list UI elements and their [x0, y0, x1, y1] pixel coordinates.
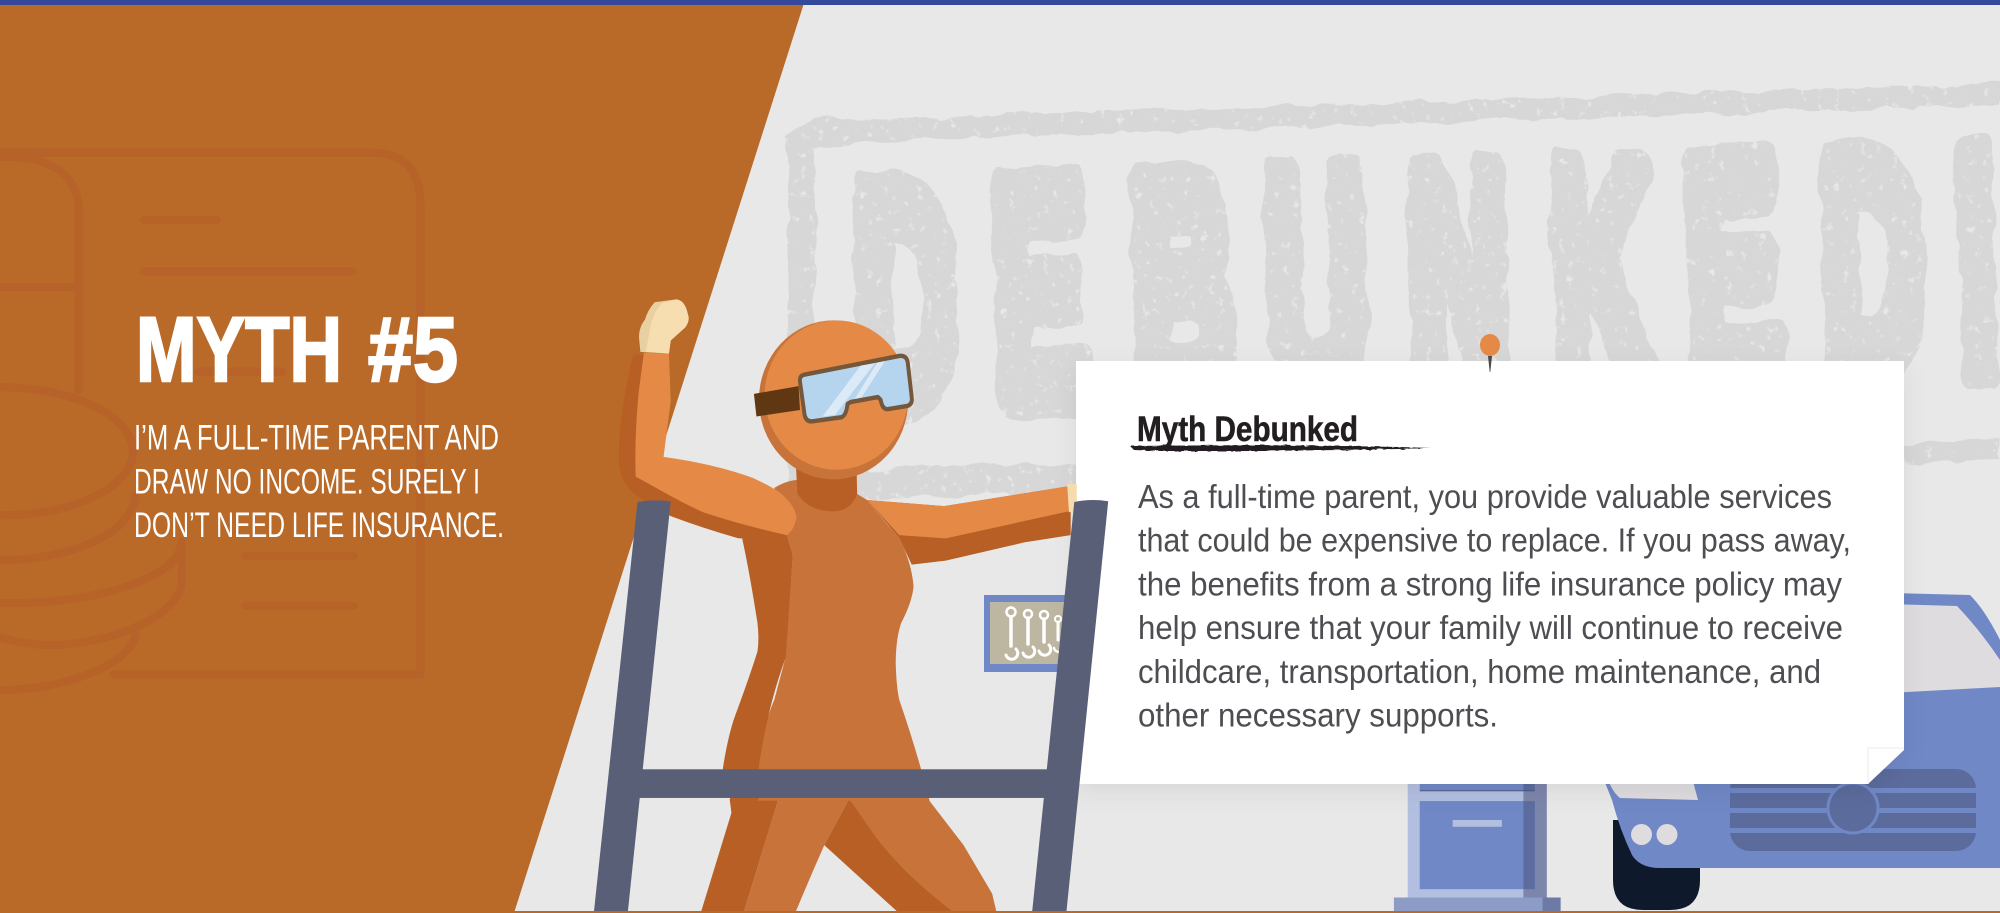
heading: Myth Debunked [1137, 410, 1358, 449]
top bar [0, 0, 2000, 5]
file cabinet [1394, 774, 1561, 912]
raised fist [639, 299, 689, 353]
torso [746, 480, 930, 801]
body text: that could be expensive to replace. If you pass away, [1138, 522, 1851, 559]
orange myth panel [0, 0, 805, 913]
body text: help ensure that your family will continue to receive [1138, 609, 1843, 646]
body text: other necessary supports. [1138, 696, 1498, 734]
left arm shadow [619, 355, 789, 538]
icon: pushpin [1480, 334, 1500, 372]
hand [1067, 484, 1077, 512]
myth statement: I’M A FULL-TIME PARENT AND [134, 418, 499, 458]
title: MYTH [136, 299, 342, 401]
brush underline [1130, 445, 1432, 451]
stamp border [788, 84, 2000, 500]
car lights [1631, 824, 1652, 845]
body text: the benefits from a strong life insurance policy may [1138, 565, 1842, 602]
myth statement: DRAW NO INCOME. SURELY I [134, 462, 480, 502]
myth statement: DON’T NEED LIFE INSURANCE. [134, 506, 504, 545]
neck [796, 462, 857, 511]
car [1600, 593, 2000, 910]
icon: wrenches [1006, 608, 1064, 659]
goggles [754, 356, 912, 421]
ghost icon: document and coins [0, 153, 420, 690]
card fold [1868, 748, 1904, 784]
debunked stamp [788, 84, 2000, 500]
car windshield [1890, 604, 2000, 693]
ladder [594, 500, 1108, 912]
figure with goggles [594, 299, 1108, 912]
body text: childcare, transportation, home maintenance, and [1138, 653, 1821, 690]
title: #5 [368, 299, 458, 401]
stamp word: DEBUNKED! [850, 87, 2000, 471]
car body [1600, 593, 2000, 868]
body text [1138, 478, 1851, 734]
note card [1076, 334, 1904, 784]
car grille [1730, 769, 1976, 851]
legs [701, 799, 779, 912]
bottom rule [0, 911, 2000, 913]
body text: As a full-time parent, you provide valuable services [1138, 478, 1832, 515]
wrench panel [984, 595, 1074, 672]
right arm [867, 486, 1071, 565]
car wheel [1613, 820, 1700, 910]
head [759, 320, 908, 479]
car headlight [1605, 770, 1698, 800]
raised arm [635, 353, 796, 535]
myth statement [134, 418, 504, 545]
